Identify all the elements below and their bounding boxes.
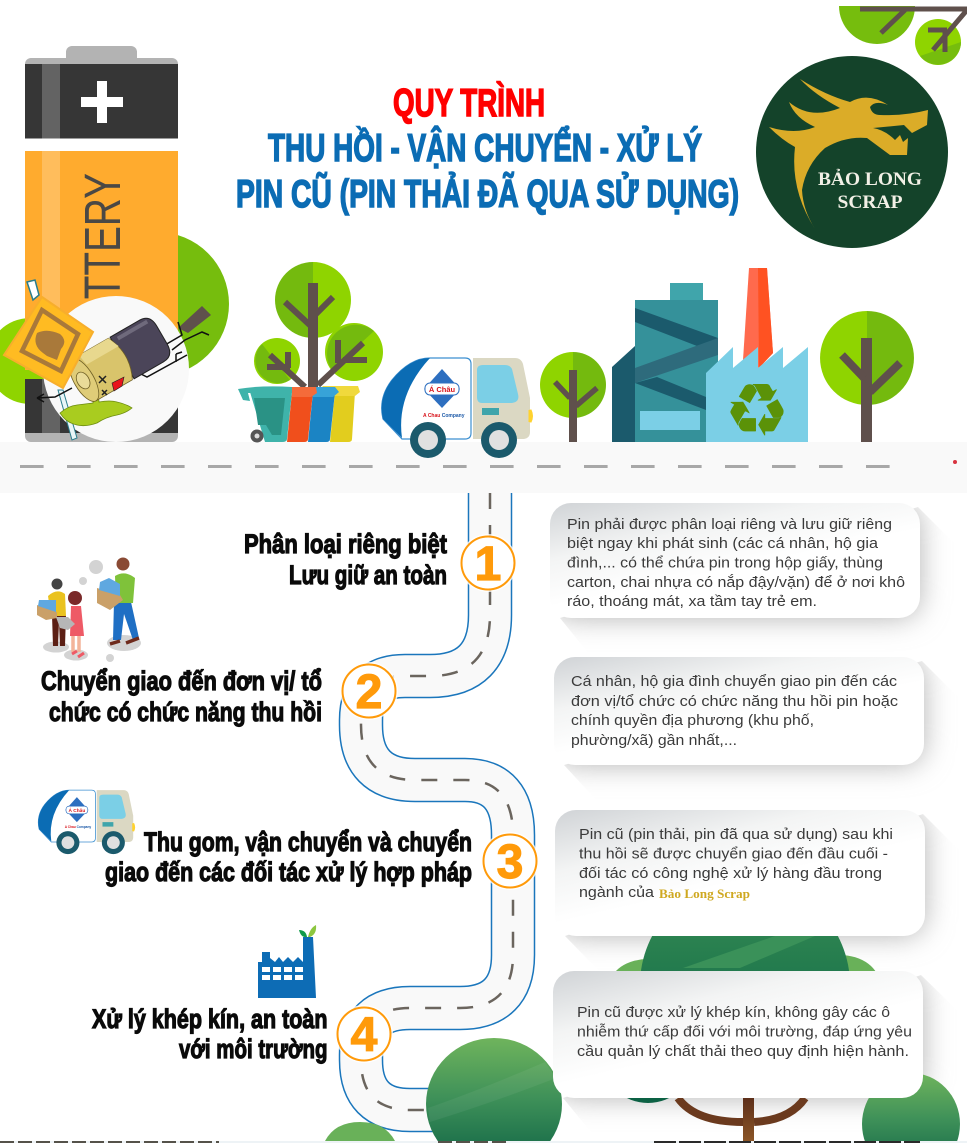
factory: ♻ xyxy=(725,368,789,452)
panel: step 3 description xyxy=(555,810,925,936)
panel: step 1 description: Pin phải được phân loại riêng và lưu giữ riêng xyxy=(567,516,892,533)
panel: step 1 description: đình,... có thể chứa pin trong hộp giấy, thùng xyxy=(567,554,883,572)
top right branches xyxy=(839,0,967,65)
title: PIN CŨ (PIN THẢI ĐÃ QUA SỬ DỤNG) xyxy=(236,172,739,216)
panel: step 3 description: ngành của xyxy=(579,884,655,901)
step 3 number: 3 xyxy=(497,836,523,889)
step 1 heading: Lưu giữ an toàn xyxy=(289,560,447,590)
panel: step 3 description: Pin cũ (pin thải, pin đã qua sử dụng) sau khi xyxy=(579,826,893,843)
small tree xyxy=(540,352,606,442)
large tree right xyxy=(820,311,914,442)
step 4 number xyxy=(335,1005,393,1063)
delivery truck: A Chau Company xyxy=(423,413,465,419)
step 4 heading: với môi trường xyxy=(179,1034,328,1064)
step 2 heading: chức có chức năng thu hồi xyxy=(49,697,322,727)
title xyxy=(236,81,739,216)
panel: step 2 description: chính quyền địa phương (khu phố, xyxy=(571,712,814,729)
battery: BATTERY xyxy=(74,173,131,348)
step 3 number xyxy=(481,832,539,890)
title: THU HỒI - VẬN CHUYỂN - XỬ LÝ xyxy=(268,125,702,170)
panel: step 1 description: ráo, thoáng mát, xa tầm tay trẻ em. xyxy=(567,593,817,610)
logo: Bao Long Scrap: BẢO LONG xyxy=(818,169,922,190)
panel: step 4 description: nhiễm thứ cấp đối với môi trường, đáp ứng yêu xyxy=(577,1024,912,1040)
icon: small truck: A Chau Company xyxy=(65,825,91,829)
delivery truck: Á Châu xyxy=(429,385,456,394)
step 1 number: 1 xyxy=(475,538,501,591)
recycling bins xyxy=(238,386,360,442)
step 1 heading: Phân loại riêng biệt xyxy=(244,529,447,559)
step 2 number xyxy=(340,662,398,720)
bottom trees behind cards xyxy=(603,880,880,1141)
step 1 number xyxy=(459,534,517,592)
factory xyxy=(612,268,808,452)
panel: step 1 description: biệt ngay khi phát sinh (các cá nhân, hộ gia xyxy=(567,535,879,552)
icon: people carrying recycling boxes xyxy=(37,558,141,662)
panel: step 4 description: cầu quản lý chất thải theo quy định hiện hành. xyxy=(577,1043,909,1060)
icon: small truck: Á Châu xyxy=(68,807,85,814)
icon: factory with leaves xyxy=(258,925,316,998)
step 2 number: 2 xyxy=(356,666,382,719)
icon: small truck xyxy=(38,790,134,854)
step 3 heading: Thu gom, vận chuyển và chuyển xyxy=(144,827,472,857)
title: QUY TRÌNH xyxy=(393,81,545,125)
battery xyxy=(25,46,178,442)
step 4 number: 4 xyxy=(351,1009,378,1062)
winding road xyxy=(361,493,513,1110)
panel: step 1 description xyxy=(550,503,920,618)
step 1 heading xyxy=(244,529,447,590)
road band xyxy=(0,442,967,493)
step 4 heading: Xử lý khép kín, an toàn xyxy=(92,1004,328,1034)
step 2 heading: Chuyển giao đến đơn vị/ tổ xyxy=(41,666,322,696)
step 3 heading: giao đến các đối tác xử lý hợp pháp xyxy=(105,857,472,887)
tree left of cards xyxy=(426,1038,562,1143)
panel: step 4 description xyxy=(553,971,923,1098)
panel: step 3 description: thu hồi sẽ được chuyển giao đến đầu cuối - xyxy=(579,846,888,862)
tree behind battery xyxy=(0,232,229,404)
warning sign xyxy=(4,297,93,388)
step 4 heading xyxy=(92,1004,328,1064)
panel: step 2 description: phường/xã) gần nhất,... xyxy=(571,732,737,749)
panel: step 2 description: Cá nhân, hộ gia đình chuyển giao pin đến các xyxy=(571,673,898,690)
panel: step 4 description: Pin cũ được xử lý khép kín, không gây các ô xyxy=(577,1004,890,1021)
panel: step 3 description: đối tác có công nghệ xử lý hàng đầu trong xyxy=(579,865,882,882)
delivery truck xyxy=(382,358,532,458)
tree group behind bins xyxy=(254,262,383,388)
bottom strip xyxy=(0,1141,967,1143)
logo: Bao Long Scrap: SCRAP xyxy=(838,192,903,213)
dead battery character with warning sign xyxy=(4,280,209,442)
tree right of cards xyxy=(862,1073,960,1143)
small dome xyxy=(325,1122,395,1141)
panel: step 3 description: Bảo Long Scrap xyxy=(659,887,750,901)
logo: Bao Long Scrap xyxy=(756,56,948,248)
step 2 heading xyxy=(41,666,322,727)
panel: step 2 description xyxy=(554,657,924,765)
card shadows xyxy=(550,503,925,1098)
panel: step 1 description: carton, chai nhựa có nắp đậy/vặn) để ở nơi khô xyxy=(567,574,905,591)
panel: step 2 description: đơn vị/tổ chức có chức năng thu hồi pin hoặc xyxy=(571,693,899,710)
step 3 heading xyxy=(105,827,472,887)
